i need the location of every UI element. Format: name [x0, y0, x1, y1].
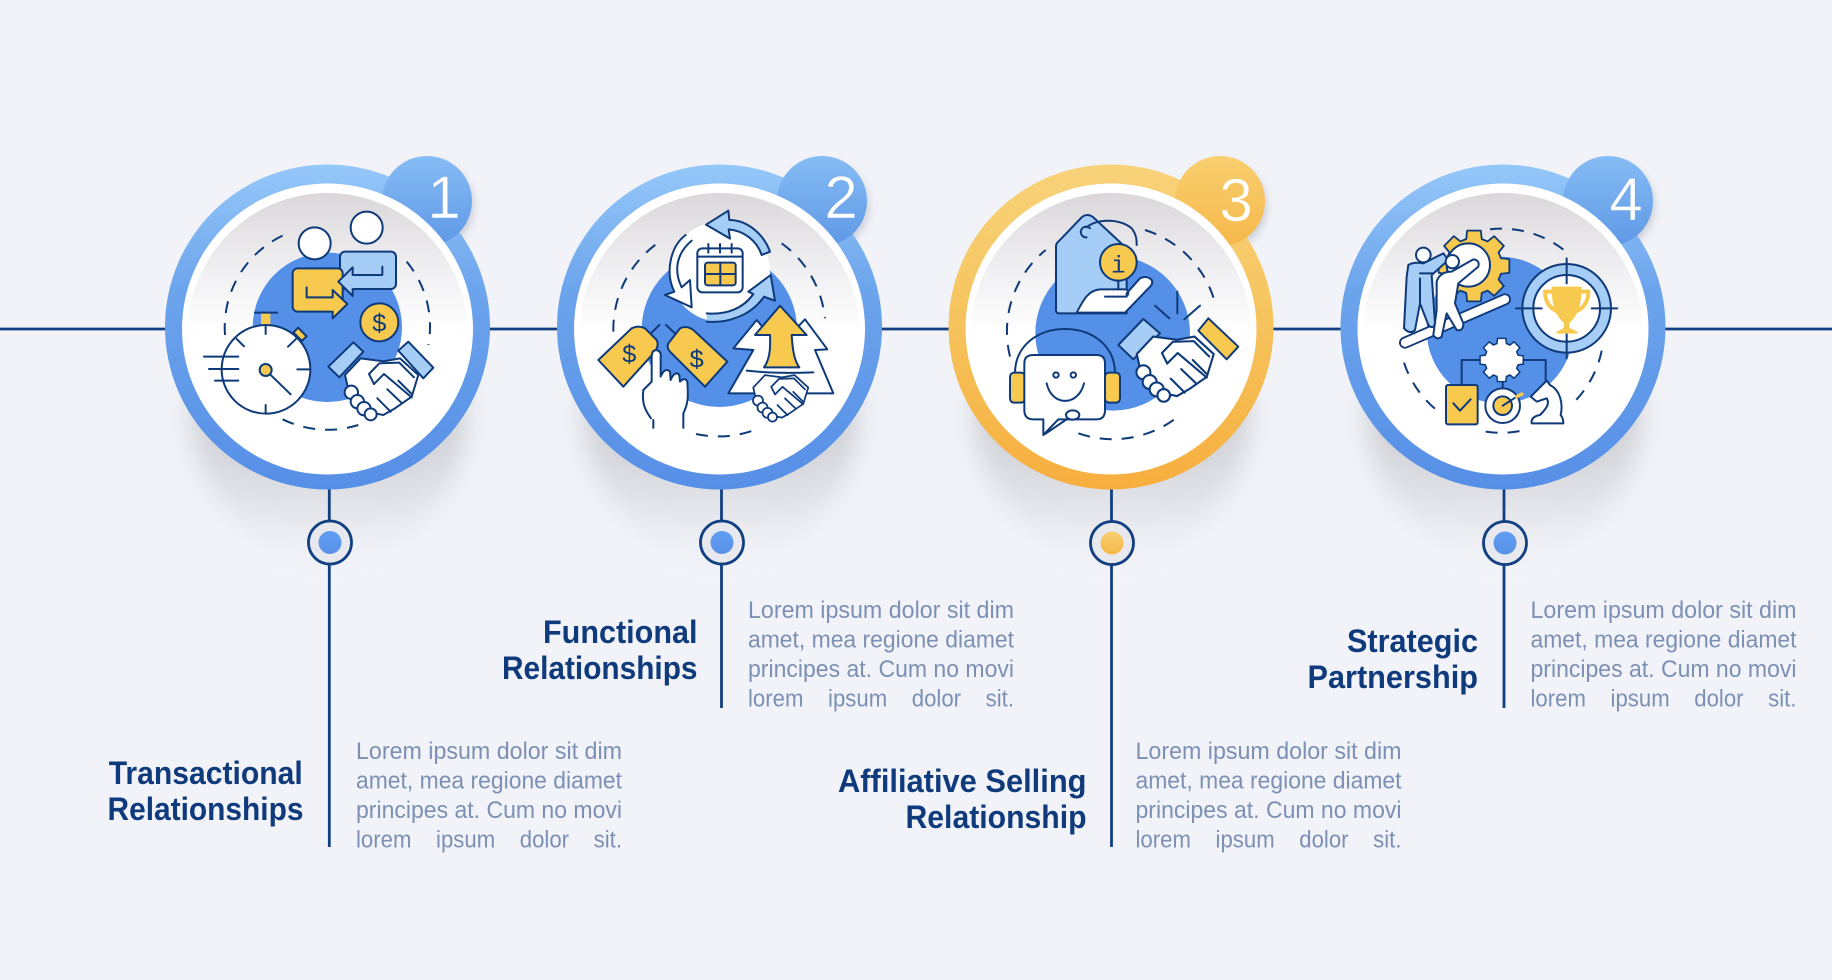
icon: info tag, chat bot headset and handshake [1007, 215, 1238, 439]
step 4 [1308, 156, 1797, 712]
icon: calendar cycle, price tags, arrow and handshake: $ [690, 346, 704, 374]
ring and badge 3 [948, 156, 1274, 490]
ring and badge 1 [165, 156, 490, 490]
heading 3: Relationship [906, 799, 1086, 835]
connector 3 [1110, 480, 1113, 847]
step 2 [502, 156, 1014, 712]
body text 1 [356, 738, 622, 854]
number 2: 2 [824, 164, 858, 231]
node 2 [700, 521, 744, 564]
heading 2: Relationships [502, 650, 698, 686]
body text 4: amet, mea regione diamet [1530, 626, 1797, 654]
body text 1: Lorem ipsum dolor sit dim [356, 738, 622, 765]
shadow 2 [585, 284, 857, 556]
body text 3 [1136, 738, 1402, 854]
number 3: 3 [1219, 167, 1253, 234]
icon: calendar cycle, price tags, arrow and handshake: $ [622, 341, 636, 369]
body text 1: lorem ipsum dolor sit. [356, 826, 622, 854]
icon: people, stopwatch, coin and handshake [204, 212, 433, 430]
body text 2: amet, mea regione diamet [748, 626, 1014, 654]
connector 1 [328, 480, 331, 847]
step 1 [108, 156, 622, 854]
icon: calendar cycle, price tags, arrow and handshake [598, 211, 833, 436]
badge shadow 2 [781, 162, 869, 250]
shadow 1 [193, 284, 465, 556]
badge shadow 1 [386, 162, 474, 250]
heading 2 [502, 614, 698, 686]
heading 4: Partnership [1308, 659, 1478, 695]
shadow 3 [976, 284, 1248, 556]
body text 1: amet, mea regione diamet [356, 768, 622, 794]
body text 2: lorem ipsum dolor sit. [748, 686, 1014, 712]
body text 3: amet, mea regione diamet [1136, 768, 1402, 794]
node 4 [1484, 522, 1526, 564]
badge shadow 4 [1567, 162, 1655, 250]
badge shadow 3 [1179, 162, 1267, 250]
number 1: 1 [427, 164, 461, 231]
body text 3: lorem ipsum dolor sit. [1136, 826, 1402, 854]
icon: teamwork gear, trophy target and strategy flow [1404, 229, 1617, 433]
body text 4: lorem ipsum dolor sit. [1530, 686, 1796, 712]
body text 1: principes at. Cum no movi [356, 797, 622, 824]
ring and badge 2 [557, 156, 882, 490]
body text 4: principes at. Cum no movi [1530, 656, 1796, 683]
body text 4 [1530, 597, 1797, 712]
heading 1 [108, 755, 304, 827]
ring and badge 4 [1340, 156, 1666, 490]
heading 4: Strategic [1347, 623, 1478, 659]
body text 4: Lorem ipsum dolor sit dim [1530, 597, 1796, 624]
body text 3: principes at. Cum no movi [1136, 797, 1402, 824]
connector 4 [1503, 480, 1505, 708]
heading 4 [1308, 623, 1478, 695]
connector 2 [720, 480, 723, 708]
heading 1: Relationships [108, 791, 304, 827]
body text 3: Lorem ipsum dolor sit dim [1136, 738, 1402, 765]
body text 2 [748, 597, 1014, 712]
body text 2: Lorem ipsum dolor sit dim [748, 597, 1014, 624]
step 3 [838, 156, 1402, 854]
number 4: 4 [1609, 166, 1643, 233]
heading 2: Functional [543, 614, 698, 650]
heading 3: Affiliative Selling [838, 763, 1086, 799]
heading 1: Transactional [109, 755, 303, 791]
shadow 4 [1368, 284, 1640, 556]
horizontal timeline [0, 328, 1832, 330]
node 3 [1090, 522, 1134, 564]
icon: info tag, chat bot headset and handshake: i [1111, 253, 1126, 280]
body text 2: principes at. Cum no movi [748, 656, 1014, 683]
node 1 [308, 521, 352, 564]
heading 3 [838, 763, 1086, 835]
icon: people, stopwatch, coin and handshake: $ [372, 309, 386, 337]
